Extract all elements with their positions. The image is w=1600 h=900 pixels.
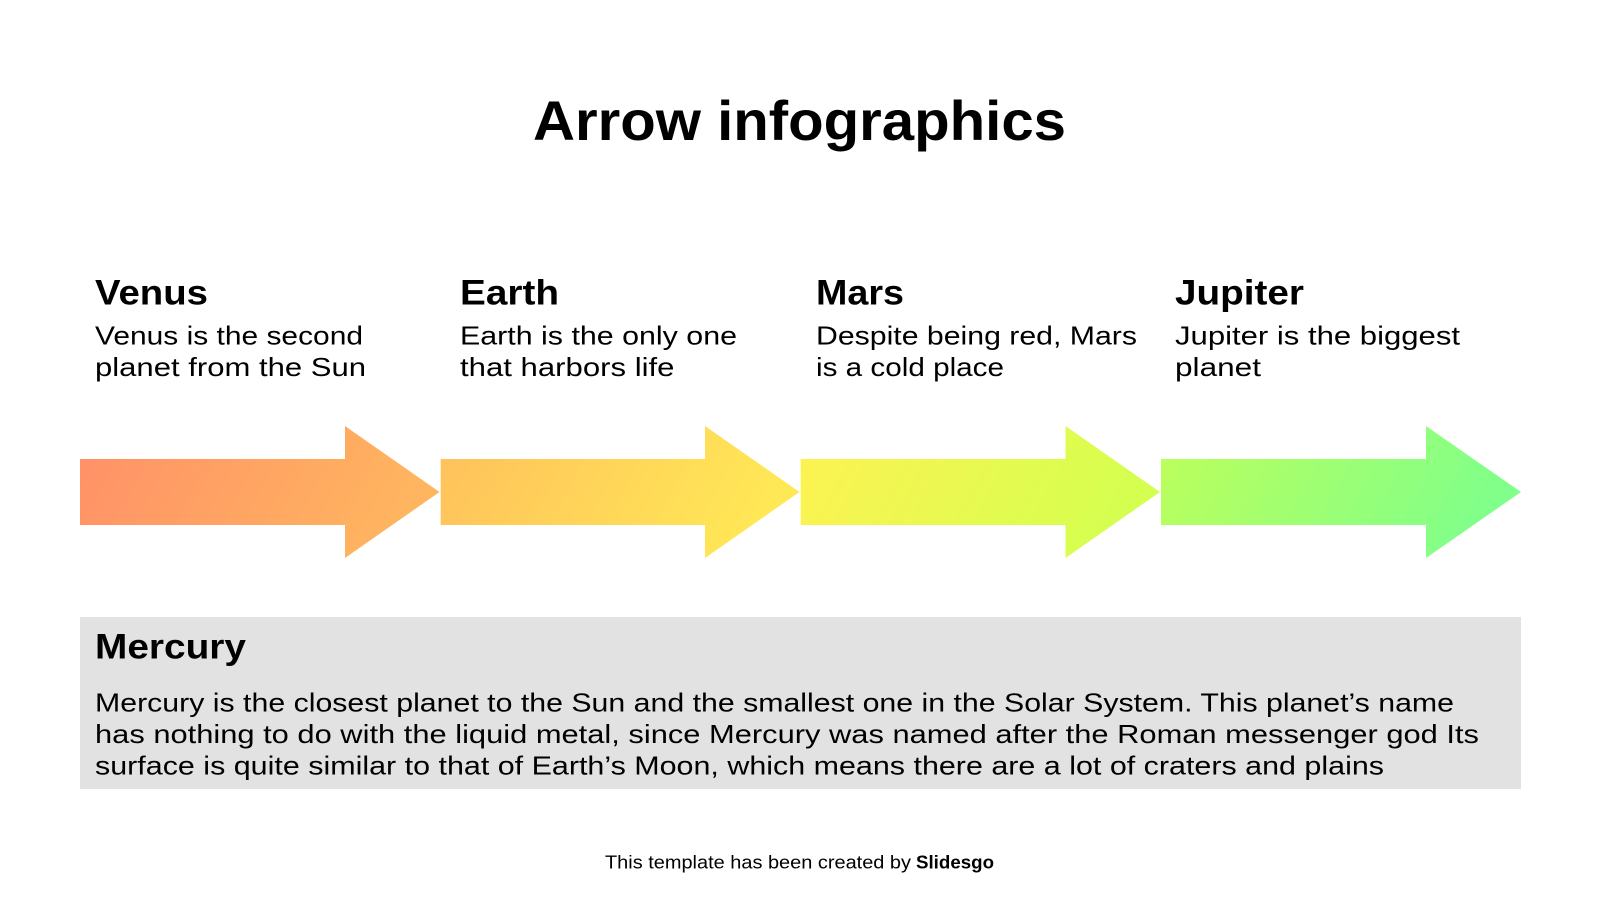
heading: Jupiter: Jupiter <box>1175 274 1304 312</box>
text: Venus description: Venus is the second <box>95 320 363 350</box>
heading: Mercury: Mercury <box>95 628 247 666</box>
arrow: Mars <box>801 426 1160 558</box>
text: Mercury description: Mercury is the closest planet to the Sun and the smallest one in the Solar System. This planet’s name <box>95 688 1454 718</box>
heading: Mars: Mars <box>816 274 904 312</box>
text: Mars description: is a cold place <box>816 352 1004 382</box>
heading: Earth: Earth <box>460 274 559 312</box>
text: Jupiter description: planet <box>1175 352 1262 382</box>
column: Venus <box>95 274 366 382</box>
footer credit: This template has been created by <box>605 852 911 872</box>
text: Earth description <box>460 320 737 382</box>
text: Mars description: Despite being red, Mars <box>816 320 1137 350</box>
text: Earth description: Earth is the only one <box>460 320 737 350</box>
arrow: Venus <box>80 426 440 558</box>
panel: Mercury <box>80 617 1521 789</box>
text: Earth description: that harbors life <box>460 352 674 382</box>
text: Mercury description <box>95 688 1479 780</box>
text: Venus description <box>95 320 366 382</box>
text: Jupiter description: Jupiter is the biggest <box>1175 320 1461 350</box>
arrow row <box>80 426 1521 558</box>
heading: Venus: Venus <box>95 274 208 312</box>
text: Mercury description: has nothing to do with the liquid metal, since Mercury was named after the Roman messenger god Its <box>95 719 1479 749</box>
arrow: Earth <box>441 426 800 558</box>
arrow: Jupiter <box>1161 426 1521 558</box>
text: Mars description <box>816 320 1137 382</box>
footer credit: Slidesgo <box>916 852 994 872</box>
title: Arrow infographics <box>533 89 1066 152</box>
text: Jupiter description <box>1175 320 1461 382</box>
column: Earth <box>460 274 737 382</box>
text: Venus description: planet from the Sun <box>95 352 366 382</box>
column: Jupiter <box>1175 274 1461 382</box>
panel background <box>80 617 1521 789</box>
text: Mercury description: surface is quite similar to that of Earth’s Moon, which means there are a lot of craters and plains <box>95 750 1384 780</box>
column: Mars <box>816 274 1137 382</box>
